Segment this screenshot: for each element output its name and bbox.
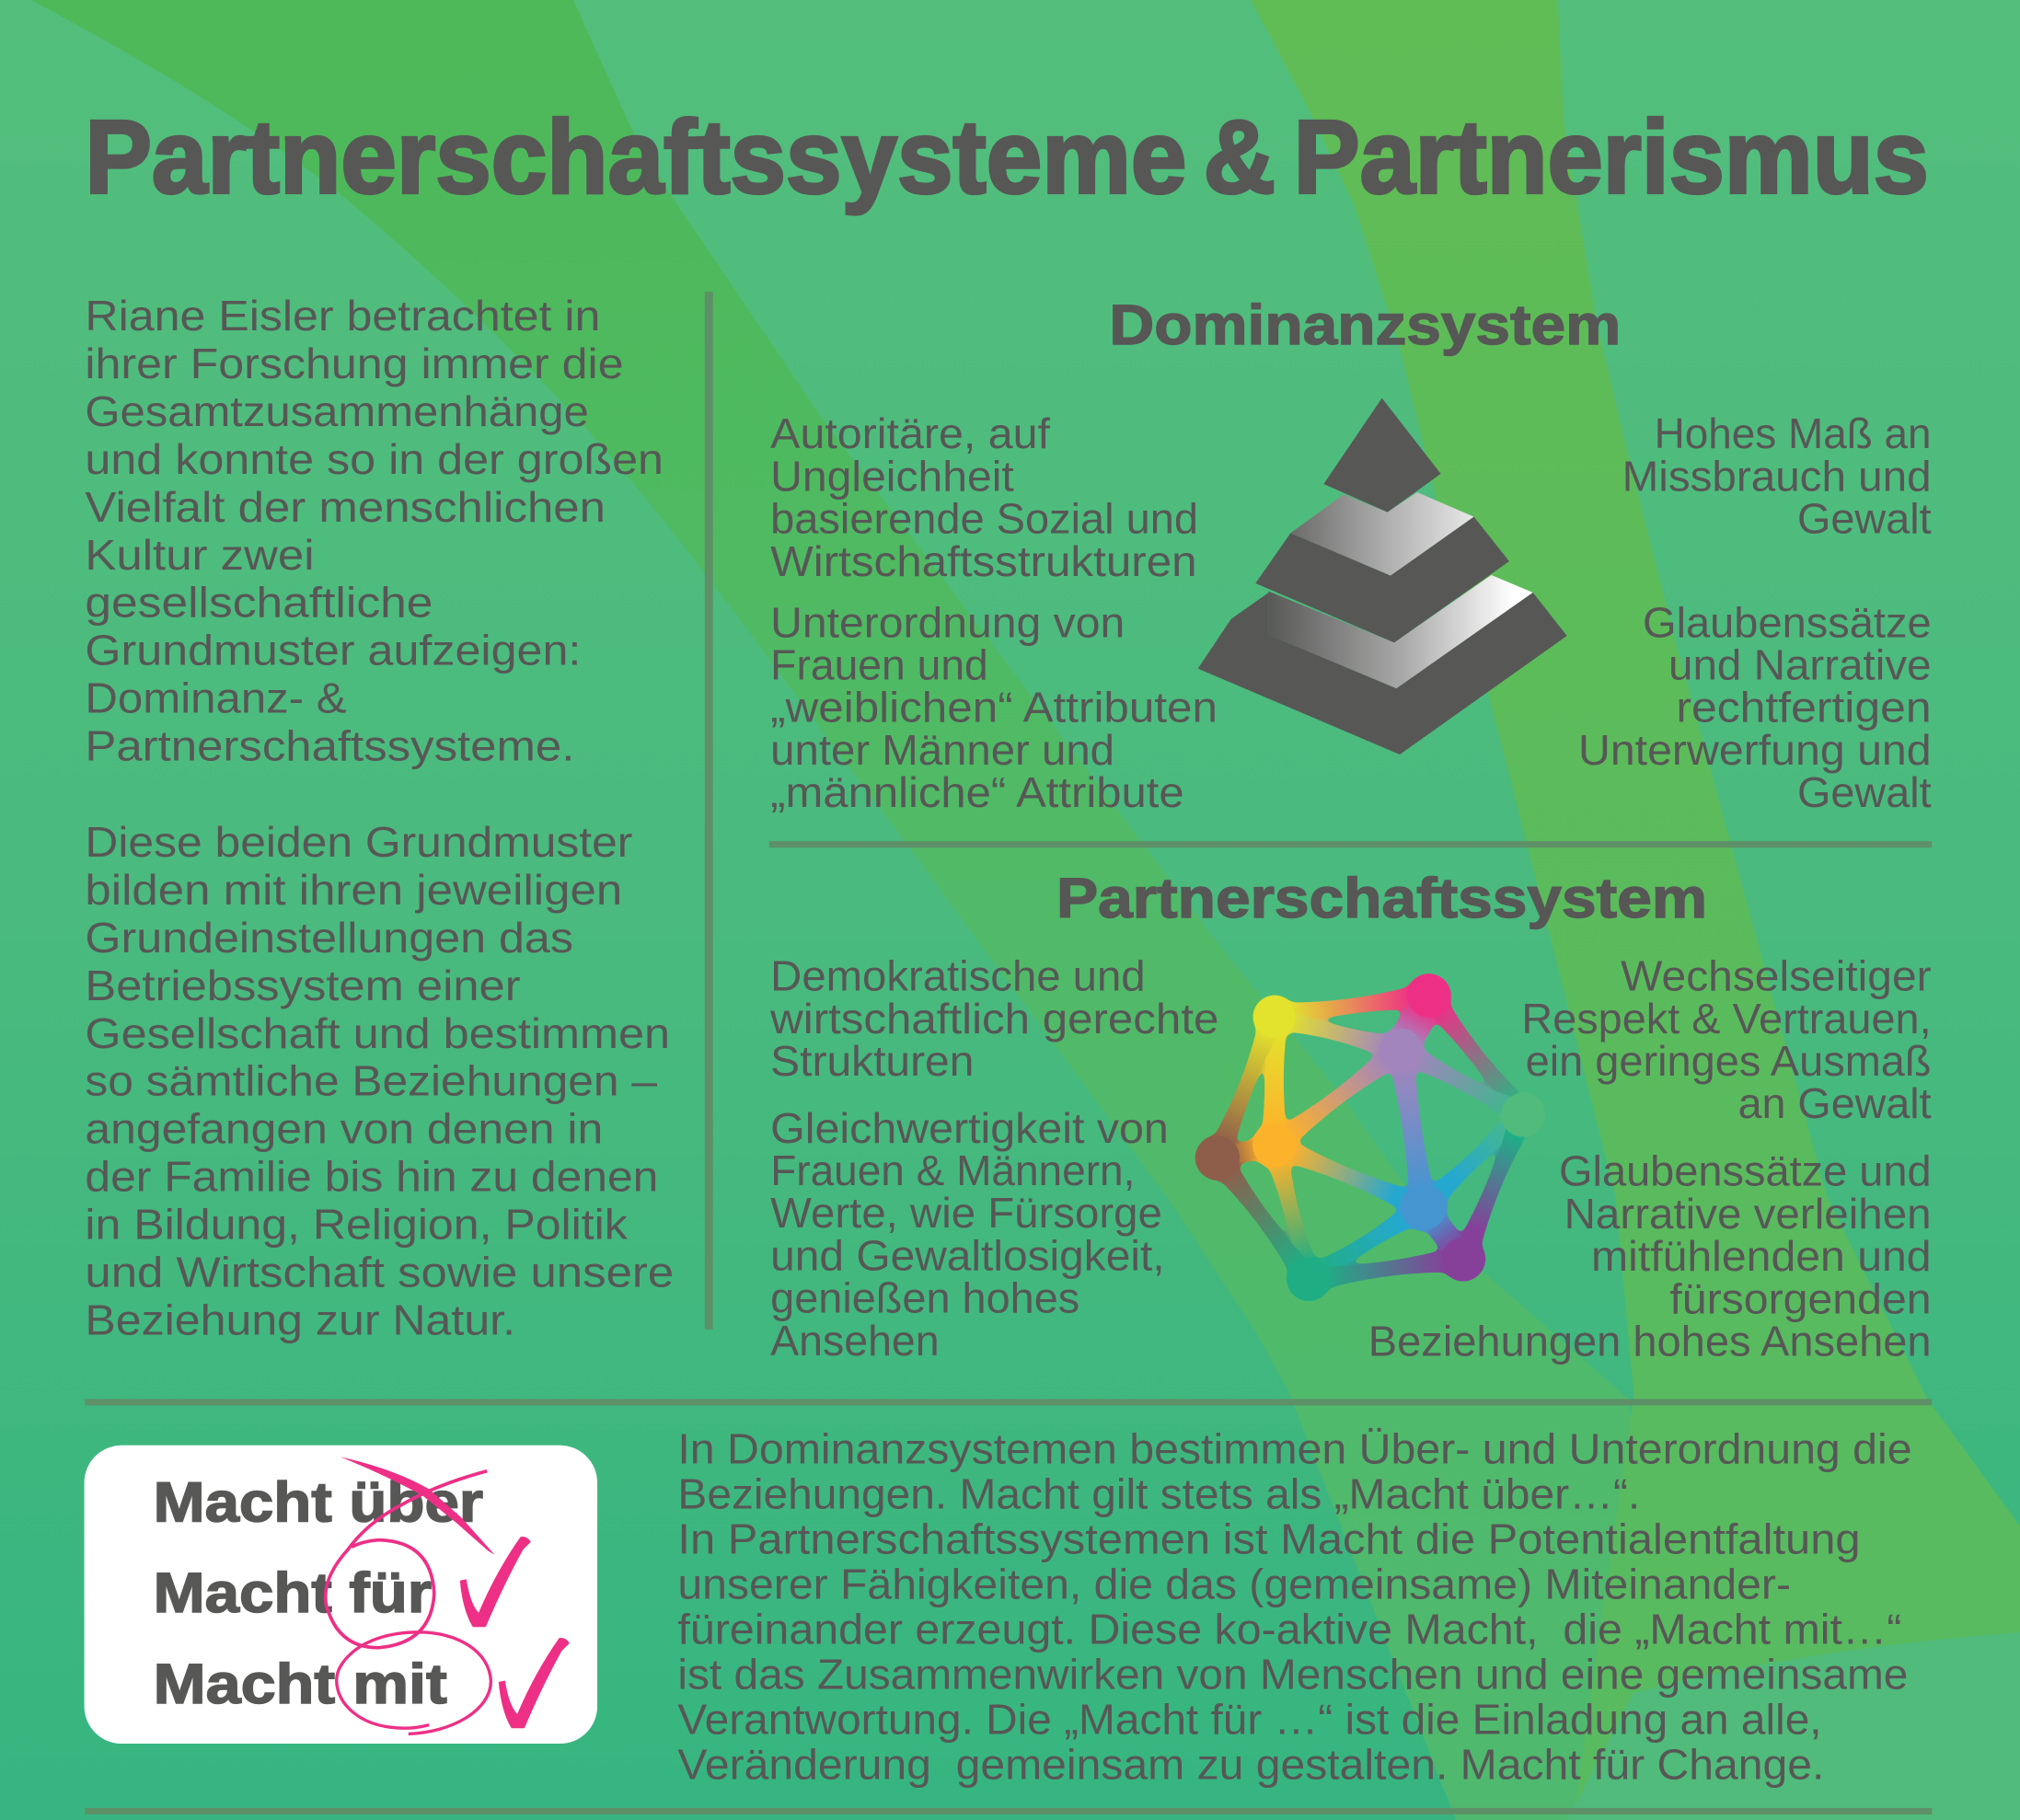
text block: Partnerschaft left column: wirtschaftlich gerechte xyxy=(769,995,1218,1042)
text block: Riane Eisler introduction: Diese beiden Grundmuster xyxy=(85,818,632,866)
text block: Partnerschaft left column: genießen hohes xyxy=(770,1274,1079,1322)
text block: Riane Eisler introduction xyxy=(85,292,674,1343)
icon: colourful network xyxy=(1195,974,1545,1300)
text block: Dominanz right column: Missbrauch und xyxy=(1622,452,1932,500)
text block: Riane Eisler introduction: und Wirtschaft sowie unsere xyxy=(85,1248,674,1296)
icon: pink cross stroke xyxy=(341,1457,495,1555)
heading: Dominanzsystem: Dominanzsystem xyxy=(1109,294,1621,357)
text block: Partnerschaft right column: Narrative verleihen xyxy=(1564,1190,1932,1238)
text block: Partnerschaft left column xyxy=(769,952,1218,1365)
text block: Dominanz right column: Glaubenssätze xyxy=(1643,598,1932,646)
text block: Partnerschaft right column: fürsorgenden xyxy=(1669,1274,1932,1322)
text block: Dominanz left column: Autoritäre, auf xyxy=(770,409,1050,457)
text block: Dominanz right column: und Narrative xyxy=(1668,641,1932,689)
text block: Dominanz left column: „weiblichen“ Attributen xyxy=(770,684,1218,731)
text block: Riane Eisler introduction: in Bildung, Religion, Politik xyxy=(85,1201,629,1249)
text block: Dominanz right column: Gewalt xyxy=(1797,495,1932,543)
text block: Macht explanation: In Dominanzsystemen bestimmen Über- und Unterordnung die xyxy=(677,1424,1912,1472)
text block: Dominanz right column: Unterwerfung und xyxy=(1578,726,1932,774)
text block: Dominanz left column: Unterordnung von xyxy=(770,598,1125,646)
title: & xyxy=(1204,98,1275,215)
text block: Macht explanation: Beziehungen. Macht gilt stets als „Macht über…“. xyxy=(677,1469,1640,1517)
title: Partnerschaftssysteme xyxy=(85,98,1186,215)
text block: Riane Eisler introduction: Beziehung zur Natur. xyxy=(85,1296,515,1343)
text block: Dominanz left column xyxy=(770,409,1218,816)
horizontal divider xyxy=(85,1399,1932,1405)
title: Partnerismus xyxy=(1294,98,1929,215)
label: Macht über: Macht über xyxy=(154,1470,483,1534)
text block: Riane Eisler introduction: gesellschaftliche xyxy=(85,579,433,627)
text block: Riane Eisler introduction: der Familie bis hin zu denen xyxy=(85,1153,658,1201)
heading: Partnerschaftssystem: Partnerschaftssystem xyxy=(1056,867,1707,930)
horizontal divider xyxy=(85,1808,1932,1814)
text block: Macht explanation: ist das Zusammenwirken von Menschen und eine gemeinsame xyxy=(677,1650,1908,1698)
text block: Riane Eisler introduction: angefangen von denen in xyxy=(85,1105,603,1153)
text block: Riane Eisler introduction: Riane Eisler betrachtet in xyxy=(85,292,600,340)
text block: Riane Eisler introduction: Grundeinstellungen das xyxy=(85,914,573,962)
card background xyxy=(85,1446,597,1744)
text block: Partnerschaft left column: Strukturen xyxy=(770,1037,974,1085)
text block: Riane Eisler introduction: Gesamtzusammenhänge xyxy=(85,387,589,435)
text block: Dominanz right column xyxy=(1578,409,1932,816)
text block: Partnerschaft right column: Beziehungen hohes Ansehen xyxy=(1368,1318,1932,1365)
text block: Dominanz left column: unter Männer und xyxy=(770,726,1114,774)
text block: Riane Eisler introduction: Dominanz- & xyxy=(85,674,347,722)
icon: pink circle around für xyxy=(326,1471,487,1648)
text block: Dominanz right column: Gewalt xyxy=(1797,768,1932,816)
text block: Macht explanation: unserer Fähigkeiten, die das (gemeinsame) Miteinander- xyxy=(677,1560,1791,1607)
text block: Partnerschaft right column: an Gewalt xyxy=(1738,1079,1932,1127)
text block: Riane Eisler introduction: Grundmuster aufzeigen: xyxy=(85,627,581,674)
text block: Dominanz right column: rechtfertigen xyxy=(1676,684,1932,731)
text block: Dominanz left column: „männliche“ Attribute xyxy=(770,768,1184,816)
label: Macht für: Macht für xyxy=(154,1561,432,1625)
text block: Partnerschaft right column: Wechselseitiger xyxy=(1621,952,1932,1000)
text block: Partnerschaft left column: und Gewaltlosigkeit, xyxy=(770,1231,1165,1279)
text block: Riane Eisler introduction: Betriebssystem einer xyxy=(85,962,521,1009)
text block: Macht explanation: Veränderung gemeinsam zu gestalten. Macht für Change. xyxy=(677,1740,1824,1788)
text block: Riane Eisler introduction: Gesellschaft und bestimmen xyxy=(85,1009,670,1057)
text block: Riane Eisler introduction: und konnte so in der großen xyxy=(85,435,664,483)
text block: Riane Eisler introduction: Kultur zwei xyxy=(85,531,315,579)
text block: Riane Eisler introduction: Vielfalt der menschlichen xyxy=(85,483,606,531)
text block: Dominanz left column: Frauen und xyxy=(770,641,988,689)
text block: Dominanz left column: Ungleichheit xyxy=(770,452,1014,500)
icon: pyramid xyxy=(1198,398,1567,754)
icon: pink check mark one xyxy=(460,1537,531,1627)
text block: Riane Eisler introduction: bilden mit ihren jeweiligen xyxy=(85,866,622,914)
text block: Partnerschaft right column: ein geringes Ausmaß xyxy=(1526,1037,1932,1085)
icon: pink circle around mit xyxy=(337,1632,491,1734)
text block: Partnerschaft left column: Werte, wie Fürsorge xyxy=(770,1189,1162,1237)
text block: Partnerschaft right column xyxy=(1368,952,1932,1365)
text block: Partnerschaft left column: Frauen & Männern, xyxy=(770,1146,1135,1194)
text block: Partnerschaft right column: mitfühlenden und xyxy=(1591,1232,1932,1280)
horizontal divider xyxy=(769,841,1932,847)
text block: Partnerschaft left column: Demokratische und xyxy=(770,952,1146,1000)
text block: Partnerschaft right column: Respekt & Vertrauen, xyxy=(1521,995,1932,1042)
text block: Macht explanation xyxy=(677,1424,1912,1788)
title xyxy=(85,98,1929,215)
text block: Riane Eisler introduction: Partnerschaftssysteme. xyxy=(85,722,574,770)
vertical divider xyxy=(705,292,713,1330)
text block: Partnerschaft left column: Ansehen xyxy=(770,1317,940,1365)
text block: Partnerschaft right column: Glaubenssätze und xyxy=(1559,1147,1932,1195)
text block: Partnerschaft left column: Gleichwertigkeit von xyxy=(770,1104,1169,1152)
text block: Riane Eisler introduction: so sämtliche Beziehungen – xyxy=(85,1057,657,1105)
text block: Dominanz left column: basierende Sozial und xyxy=(770,495,1198,543)
text block: Riane Eisler introduction: ihrer Forschung immer die xyxy=(85,340,624,387)
icon: pink check mark two xyxy=(499,1638,570,1728)
label: Macht mit: Macht mit xyxy=(154,1653,447,1716)
text block: Macht explanation: füreinander erzeugt. Diese ko-aktive Macht, die „Macht mit…“ xyxy=(677,1605,1901,1653)
text block: Macht explanation: Verantwortung. Die „Macht für …“ ist die Einladung an alle, xyxy=(677,1695,1822,1743)
text block: Dominanz left column: Wirtschaftsstrukturen xyxy=(770,537,1197,585)
text block: Macht explanation: In Partnerschaftssystemen ist Macht die Potentialentfaltung xyxy=(677,1515,1861,1562)
panel: Macht card xyxy=(85,1446,597,1744)
text block: Dominanz right column: Hohes Maß an xyxy=(1655,409,1932,457)
